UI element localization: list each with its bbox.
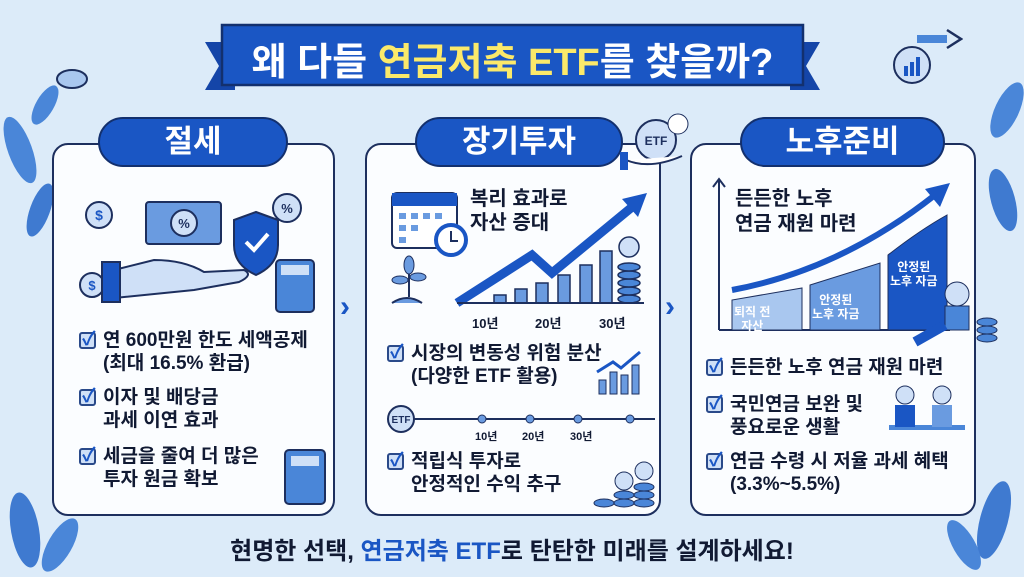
icon: mini bar chart [596,350,641,394]
icon: calculator [284,449,326,505]
checklist item 2 [387,451,561,495]
decorative bottom leaves [10,492,78,572]
panel: 절세 [52,143,335,516]
panel: 노후준비 [690,143,976,516]
checklist item 1: 든든한 노후 연금 재원 마련 [730,357,943,378]
panel: 장기투자: 20년 [535,316,561,331]
illustration: elderly couple [889,386,965,430]
decorative leaves left [4,85,58,236]
checklist item 3: (3.3%~5.5%) [730,474,840,495]
timeline: ETF [392,415,410,426]
text: 든든한 노후 연금 재원 마련: 연금 재원 마련 [735,213,857,235]
icon: ETF globe in hand: ETF [645,134,667,148]
checklist item 1 [387,342,602,387]
panel: 노후준비: 노후 자금 [812,307,860,321]
panel: 노후준비: 자산 [741,319,763,333]
illustration: hand with money and shield [79,193,315,313]
panel: 노후준비: 안정된 [897,260,930,274]
icon: coin chart top right [893,46,931,84]
arrow: chevron 2: › [665,290,675,323]
panel: 노후준비: 노후 자금 [890,274,938,288]
checklist item 2: 안정적인 수익 추구 [411,474,561,495]
checklist item 3: 투자 원금 확보 [103,469,218,490]
title ribbon [205,24,820,90]
decorative leaves right [988,82,1024,232]
pill: 절세 [98,117,288,167]
title ribbon: 왜 다들 연금저축 ETF를 찾을까? [252,42,773,84]
checklist item 1: (다양한 ETF 활용) [411,366,558,387]
arrow: chevron 1: › [340,290,350,323]
timeline [387,405,655,433]
chart: compound growth [392,193,647,307]
checklist item 2 [79,387,218,431]
checklist item 3 [79,446,259,490]
chart: retirement growth [712,178,950,331]
checklist item 2: 적립식 투자로 [411,451,521,472]
icon: calendar clock [391,192,468,257]
checklist item 2: 국민연금 보완 및 [730,394,863,415]
checklist item 1 [79,330,308,374]
text: 복리 효과로 자산 증대 [470,188,568,234]
illustration: hand with money and shield: % [178,216,190,231]
panel: 장기투자: 30년 [599,316,625,331]
checklist item 2: 과세 이연 효과 [103,410,218,431]
text: 든든한 노후 연금 재원 마련: 든든한 노후 [735,188,833,210]
icon: ETF globe in hand [620,114,688,170]
checklist item 3 [706,451,949,495]
pill: 노후준비: 노후준비 [785,124,900,159]
checklist item 2: 풍요로운 생활 [730,417,840,438]
axis labels: 10년 [472,316,498,331]
text: 복리 효과로 자산 증대: 복리 효과로 [470,188,568,210]
illustration: hand with money and shield: $ [95,207,103,223]
illustration: relaxing man [912,282,998,346]
panel: 장기투자: 10년 [475,431,497,443]
text: 복리 효과로 자산 증대: 자산 증대 [470,212,549,234]
panel: 장기투자: 30년 [570,431,592,443]
icon: coin stacks [594,462,654,508]
checklist item 3: 세금을 줄여 더 많은 [103,446,259,467]
pill: 장기투자 [415,117,623,167]
icon: arrow top right [917,29,963,49]
pill: 노후준비 [740,117,945,167]
illustration: hand with money and shield: $ [88,278,96,293]
checklist item 2 [706,394,863,438]
text: 든든한 노후 연금 재원 마련 [735,188,857,235]
panel: 장기투자: 20년 [522,431,544,443]
icon: coin top left [56,69,88,89]
pill: 장기투자: 장기투자 [462,124,576,159]
checklist item 1: 시장의 변동성 위험 분산 [411,343,602,364]
checklist item 1: 연 600만원 한도 세액공제 [103,330,308,351]
panel: 노후준비: 안정된 [819,293,852,307]
panel: 장기투자 [365,143,661,516]
illustration: hand with money and shield: % [281,201,293,216]
pill: 절세: 절세 [164,124,222,159]
checklist item 3: 연금 수령 시 저율 과세 혜택 [730,451,949,472]
footer slogan: 현명한 선택, 연금저축 ETF로 탄탄한 미래를 설계하세요! [230,538,794,565]
checklist item 1: (최대 16.5% 환급) [103,353,250,374]
panel: 노후준비: 퇴직 전 [734,305,770,319]
checklist item 2: 이자 및 배당금 [103,387,218,408]
